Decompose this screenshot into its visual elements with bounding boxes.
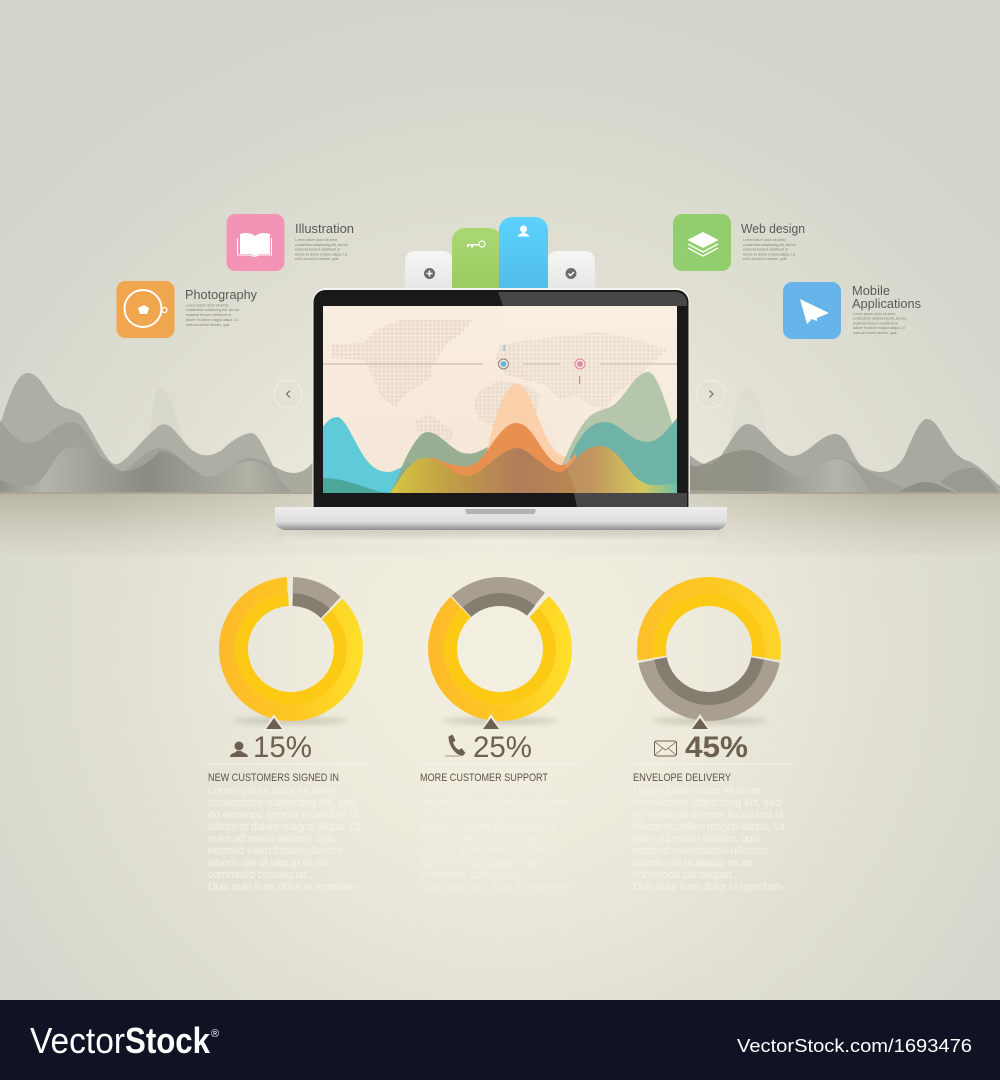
footer url: VectorStock.com/1693476 xyxy=(737,1035,972,1056)
right wave landscape xyxy=(690,386,1000,493)
pointer xyxy=(263,714,285,731)
column: envelope delivery: consectetur adipisicing elit, sed xyxy=(633,797,781,809)
column: new customers: do eiusmod tempor incididunt ut xyxy=(208,809,359,821)
column: customer support xyxy=(420,772,572,893)
stat: 25% xyxy=(445,731,532,764)
label: photography xyxy=(185,288,258,327)
donut chart: 15% xyxy=(227,585,355,731)
divider: 15% xyxy=(208,764,367,765)
floor band xyxy=(0,493,1000,555)
label: illustration xyxy=(295,222,354,261)
pointer xyxy=(480,714,502,731)
label: mobile applications: Mobile xyxy=(852,284,890,298)
donut chart: 25% xyxy=(436,585,564,731)
column: customer support: do eiusmod tempor incididunt ut xyxy=(420,809,571,821)
column: new customers: consectetur adipisicing elit, sed xyxy=(208,797,356,809)
icon: web design xyxy=(673,214,731,271)
label: mobile applications: labore et dolore magna aliqua. Ut xyxy=(853,326,905,330)
label: mobile applications: Applications xyxy=(852,297,921,311)
tab: add xyxy=(405,251,453,289)
label: illustration: enim ad minim veniam, quis xyxy=(295,257,339,261)
label: mobile applications: consectetur adipisicing elit, sed do xyxy=(853,316,906,320)
label: photography: labore et dolore magna aliqua. Ut xyxy=(186,318,238,322)
icon: mobile applications xyxy=(783,282,841,339)
column: new customers: Duis aute irure dolor in reprehen- xyxy=(208,881,360,893)
label: illustration: eiusmod tempor incididunt ut xyxy=(295,248,340,252)
label: photography: enim ad minim veniam, quis xyxy=(186,323,230,327)
footer logo: ® xyxy=(211,1028,219,1040)
column: new customers: nostrud exercitation ullamco xyxy=(208,845,343,857)
label: photography: consectetur adipisicing elit, sed do xyxy=(186,308,239,312)
map pin: blue xyxy=(498,345,508,369)
column: customer support: consectetur adipisicing elit, sed xyxy=(420,797,568,809)
column: new customers: enim ad minim veniam, quis xyxy=(208,833,336,845)
column: customer support: Lorem ipsum dolor sit amet, xyxy=(420,785,550,797)
label: photography: eiusmod tempor incididunt ut xyxy=(186,313,231,317)
horizon line xyxy=(0,492,1000,494)
screen glare xyxy=(498,306,677,493)
footer logo: Stock xyxy=(125,1020,211,1061)
column: customer support: commodo consequat... xyxy=(420,869,527,881)
stat: 45%: 45% xyxy=(685,731,748,764)
divider: 45% xyxy=(633,764,792,765)
laptop notch xyxy=(466,509,536,514)
column: customer support: labore et dolore magna aliqua. Ut xyxy=(420,821,572,833)
column: envelope delivery: labore et dolore magna aliqua. Ut xyxy=(633,821,785,833)
nav button: previous xyxy=(274,380,302,408)
stat: 15%: 15% xyxy=(253,731,312,764)
laptop bezel xyxy=(312,288,690,507)
footer logo: Vector xyxy=(30,1020,125,1061)
pointer xyxy=(689,714,711,731)
column: envelope delivery: enim ad minim veniam, quis xyxy=(633,833,760,845)
label: web design: eiusmod tempor incididunt ut xyxy=(743,248,788,252)
label: illustration: Illustration xyxy=(295,222,354,236)
label: web design: consectetur adipisicing elit, sed do xyxy=(743,243,796,247)
area chart xyxy=(323,372,677,493)
label: illustration: labore et dolore magna aliqua. Ut xyxy=(295,252,347,256)
tab: check xyxy=(547,251,595,289)
footer bar xyxy=(0,1000,1000,1080)
column: customer support: Duis aute irure dolor in reprehen- xyxy=(420,881,572,893)
nav button: next xyxy=(697,380,725,408)
column: customer support: enim ad minim veniam, quis xyxy=(420,833,548,845)
world map xyxy=(332,320,668,470)
left wave landscape xyxy=(0,373,313,493)
bezel glare xyxy=(498,292,687,507)
column: new customers: laboris nisi ut aliquip ex ea xyxy=(208,857,329,869)
tab: key xyxy=(452,228,502,289)
column: envelope delivery: ENVELOPE DELIVERY xyxy=(633,772,732,784)
column: envelope delivery: do eiusmod tempor incididunt ut xyxy=(633,809,784,821)
column: new customers: NEW CUSTOMERS SIGNED IN xyxy=(208,772,339,784)
map pin: pink xyxy=(575,359,585,384)
donut chart: 45% xyxy=(645,585,773,731)
label: photography: Photography xyxy=(185,288,258,302)
laptop xyxy=(275,288,727,544)
divider: 25% xyxy=(420,764,579,765)
laptop shadow xyxy=(275,530,725,536)
column: envelope delivery xyxy=(633,772,785,893)
label: web design: Lorem ipsum dolor sit amet, xyxy=(743,238,786,242)
laptop base xyxy=(275,507,727,530)
label: illustration: Lorem ipsum dolor sit amet, xyxy=(295,238,338,242)
map marker line xyxy=(323,363,677,365)
stat: 45% xyxy=(654,731,748,764)
column: envelope delivery: commodo consequat... xyxy=(633,869,740,881)
column: envelope delivery: Duis aute irure dolor in reprehen- xyxy=(633,881,785,893)
tab: user xyxy=(499,217,548,289)
column: envelope delivery: nostrud exercitation ullamco xyxy=(633,845,768,857)
column: customer support: MORE CUSTOMER SUPPORT xyxy=(420,772,548,784)
label: web design: enim ad minim veniam, quis xyxy=(743,257,787,261)
label: mobile applications: eiusmod tempor incididunt ut xyxy=(853,322,898,326)
label: photography: Lorem ipsum dolor sit amet, xyxy=(186,304,229,308)
column: envelope delivery: Lorem ipsum dolor sit amet, xyxy=(633,785,763,797)
column: new customers: labore et dolore magna aliqua. Ut xyxy=(208,821,360,833)
column: customer support: laboris nisi ut aliquip ex ea xyxy=(420,857,541,869)
label: mobile applications: enim ad minim veniam, quis xyxy=(853,331,897,335)
stat: 25%: 25% xyxy=(473,731,532,764)
label: mobile applications: Lorem ipsum dolor sit amet, xyxy=(853,312,896,316)
icon: illustration xyxy=(226,214,284,271)
footer logo xyxy=(30,1020,219,1061)
laptop reflection xyxy=(285,532,717,544)
column: new customers xyxy=(208,772,360,893)
column: customer support: nostrud exercitation ullamco xyxy=(420,845,555,857)
screen xyxy=(323,306,677,493)
label: web design: labore et dolore magna aliqua. Ut xyxy=(743,252,795,256)
column: new customers: commodo consequat... xyxy=(208,869,315,881)
column: new customers: Lorem ipsum dolor sit amet, xyxy=(208,785,338,797)
column: envelope delivery: laboris nisi ut aliquip ex ea xyxy=(633,857,754,869)
label: illustration: consectetur adipisicing elit, sed do xyxy=(295,243,348,247)
icon: photography xyxy=(116,281,174,338)
label: mobile applications xyxy=(852,284,921,335)
label: web design xyxy=(741,222,805,261)
label: web design: Web design xyxy=(741,222,805,236)
